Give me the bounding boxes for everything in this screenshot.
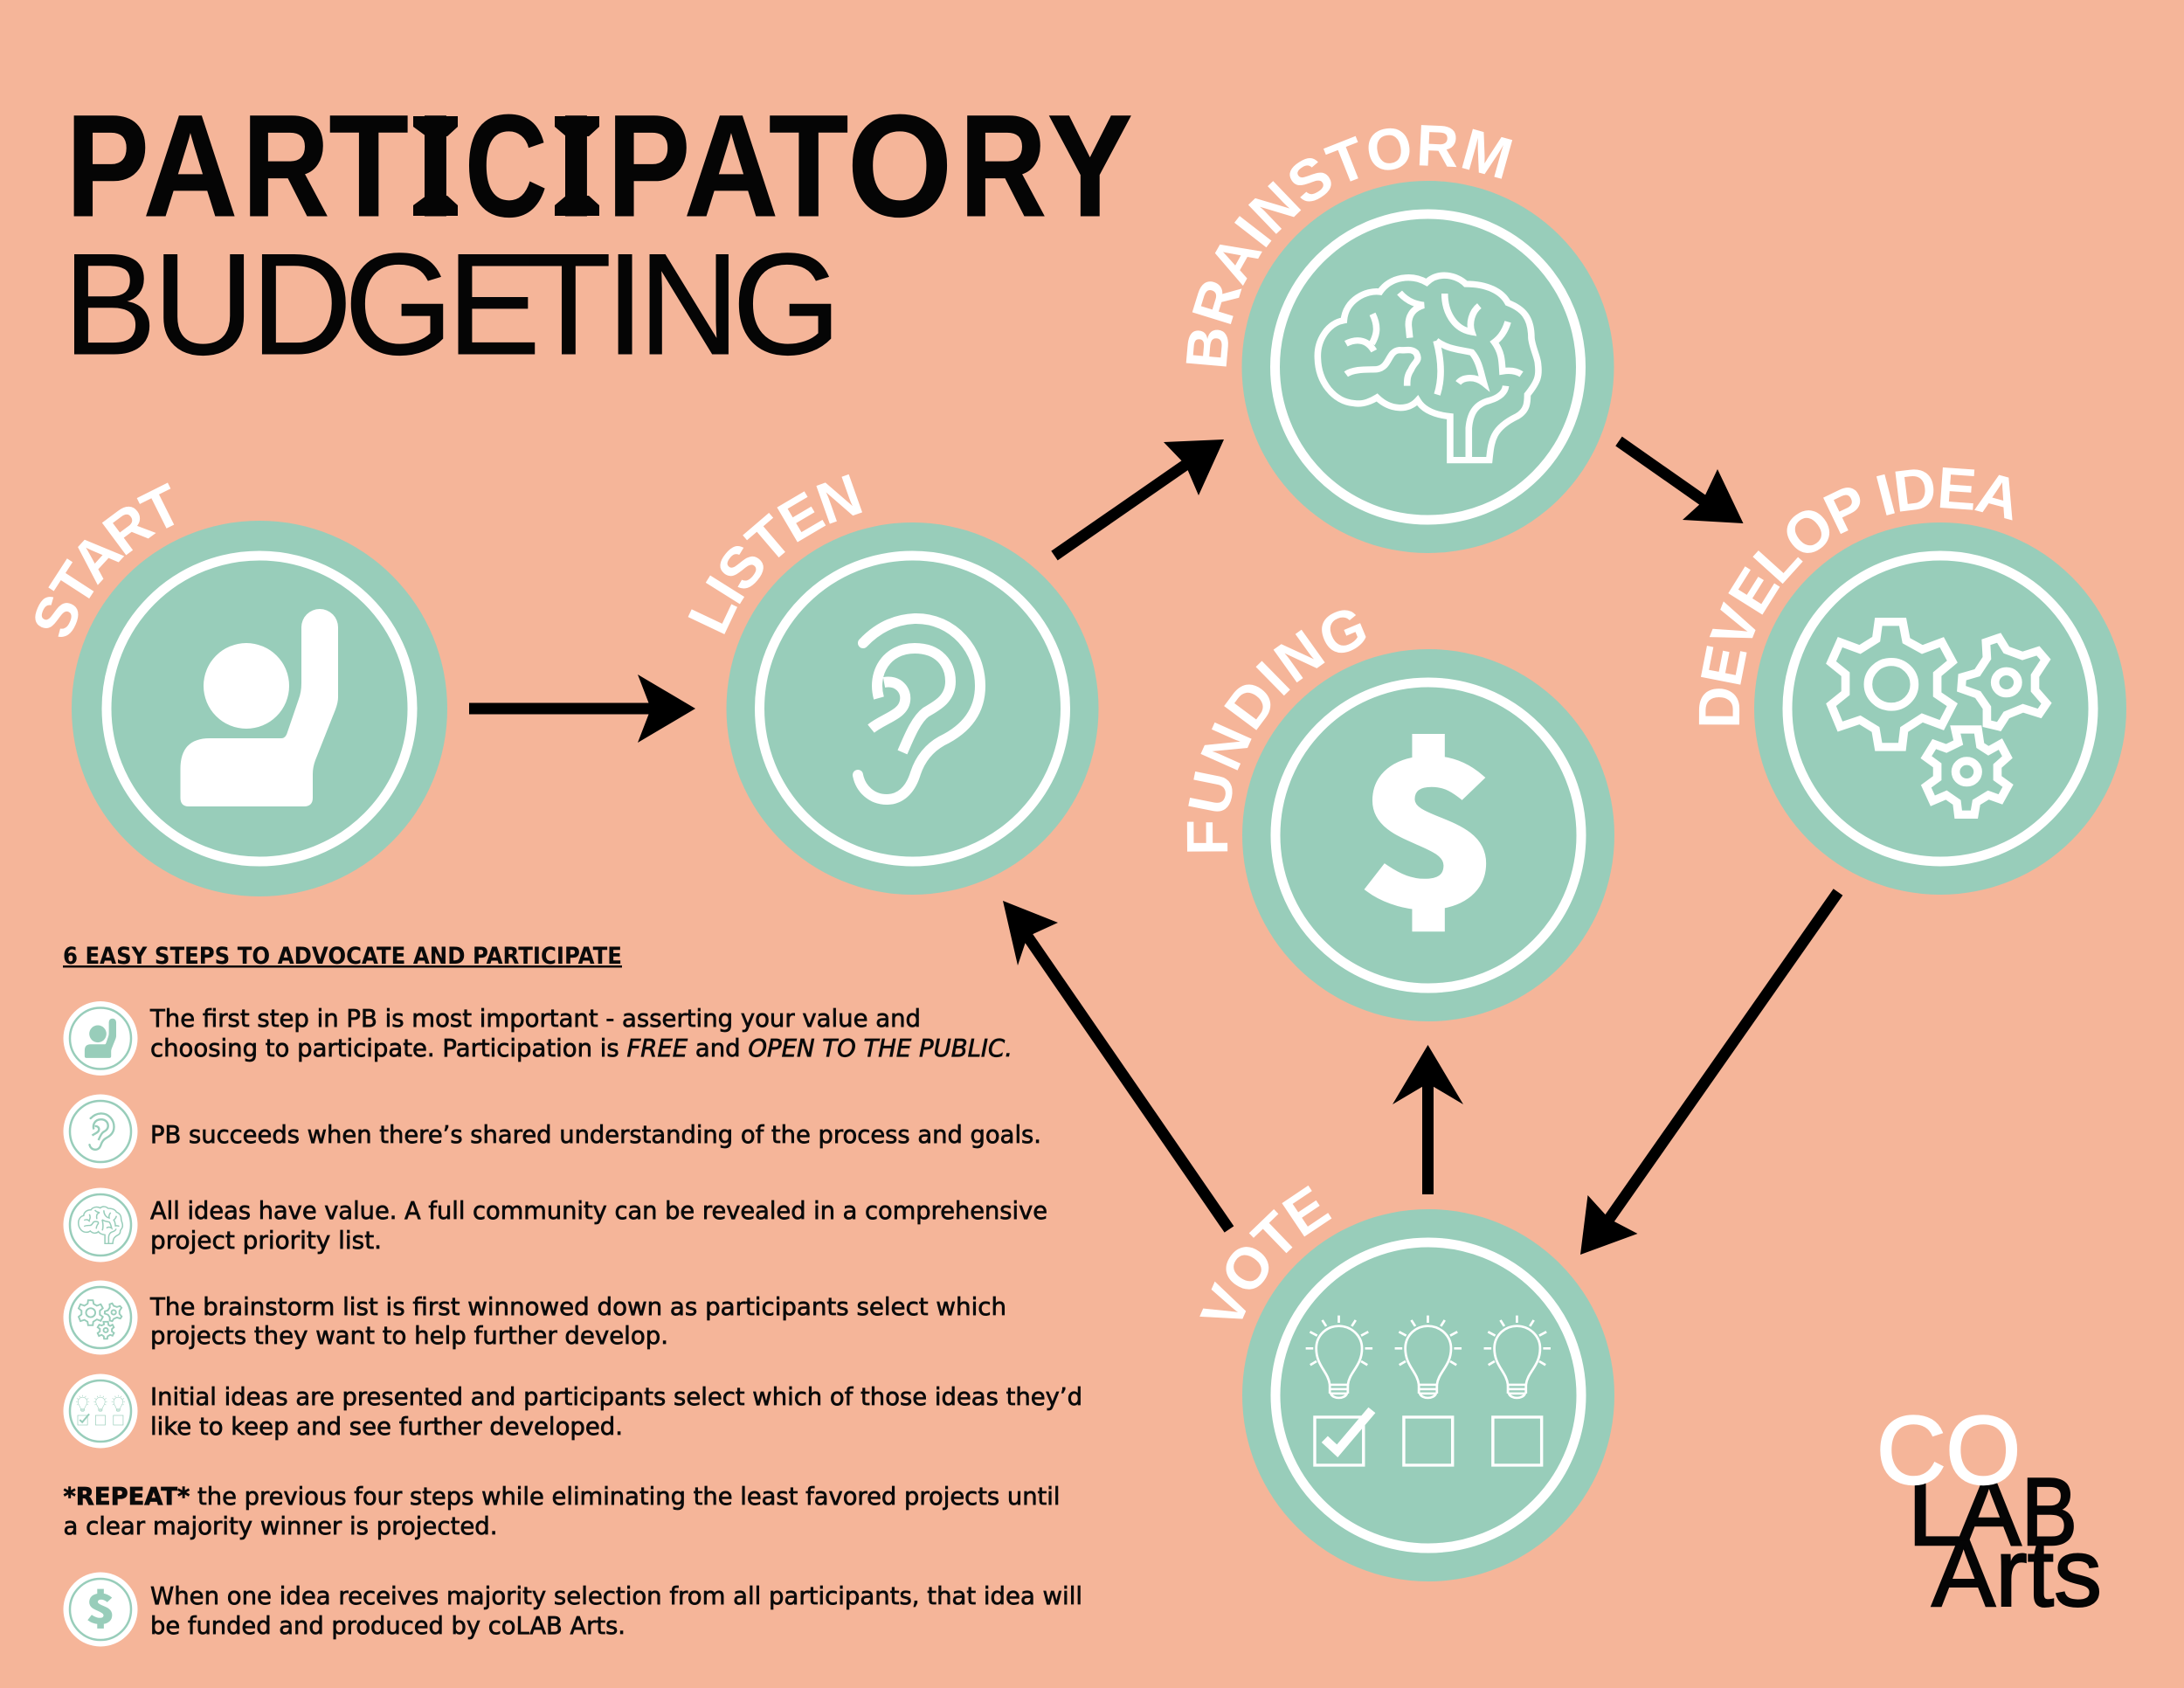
logo word: LAB xyxy=(1908,1458,2077,1566)
logo word: Arts: Arts xyxy=(1932,1519,2102,1627)
icon: light bulbs and check boxes xyxy=(1306,1316,1551,1465)
icon: ear xyxy=(858,619,980,799)
logo word: LAB: B xyxy=(2022,1458,2077,1565)
step 1 row xyxy=(63,1001,1013,1076)
arrow: vote to listen xyxy=(1003,901,1229,1229)
step 6 text: When one idea receives majority selection from all participants, that idea will xyxy=(150,1582,1082,1610)
title line: PARTICIPATORY: Y xyxy=(1047,85,1132,247)
mini icon: ear xyxy=(63,1094,138,1169)
arrow: listen to brainstorm xyxy=(1054,439,1224,556)
section heading: 6 EASY STEPS TO ADVOCATE AND PARTICIPATE xyxy=(63,943,622,970)
step 6 text xyxy=(150,1582,1082,1640)
mini icon: hand xyxy=(63,1001,138,1076)
step 1 text: The first step in PB is most important - asserting your value and xyxy=(149,1005,921,1033)
step 4 text: projects they want to help further develop. xyxy=(150,1322,668,1350)
step 3 text: project priority list. xyxy=(150,1227,382,1255)
mini icon: brain xyxy=(63,1188,138,1262)
label: FUNDING: FUNDING xyxy=(1186,610,1366,852)
title line: PARTICIPATORY: R xyxy=(959,86,1047,247)
arrow: brainstorm to develop idea xyxy=(1619,441,1744,523)
repeat note xyxy=(63,1483,1061,1540)
badge xyxy=(1242,1209,1614,1581)
step 2 text: PB succeeds when there’s shared understanding of the process and goals. xyxy=(150,1121,1041,1149)
title line: PARTICIPATORY: I xyxy=(556,86,597,247)
title xyxy=(63,85,1132,385)
step 6 text: be funded and produced by coLAB Arts. xyxy=(150,1612,625,1640)
step 4 text xyxy=(149,1293,1006,1350)
icon: brain xyxy=(1317,275,1538,460)
title line: PARTICIPATORY: P xyxy=(607,85,690,246)
title line: PARTICIPATORY: A xyxy=(143,86,238,247)
step 5 text xyxy=(150,1383,1082,1441)
title line: PARTICIPATORY: C xyxy=(465,85,548,247)
step 3 text: All ideas have value. A full community can be revealed in a comprehensive xyxy=(150,1197,1047,1225)
title line: PARTICIPATORY: O xyxy=(847,85,952,246)
badge xyxy=(1242,181,1614,553)
title line: PARTICIPATORY: T xyxy=(769,86,848,247)
title line: PARTICIPATORY: R xyxy=(242,86,329,247)
logo: coLAB Arts xyxy=(1876,1397,2102,1627)
mini icon: dollar: $ xyxy=(86,1578,114,1635)
step 5 text: Initial ideas are presented and participants select which of those ideas they’d xyxy=(150,1383,1082,1411)
panel: step START xyxy=(35,482,447,896)
repeat note: a clear majority winner is projected. xyxy=(63,1512,498,1540)
label: BRAINSTORM: BRAINSTORM xyxy=(1186,125,1513,367)
text panel: six easy steps xyxy=(63,943,1082,1646)
logo word: LAB: LA xyxy=(1908,1458,2022,1566)
mini icon: dollar xyxy=(63,1573,138,1646)
step 5 row xyxy=(63,1373,1082,1449)
icon: dollar sign: $ xyxy=(1359,677,1497,960)
step 4 text: The brainstorm list is first winnowed down as participants select which xyxy=(149,1293,1006,1321)
badge xyxy=(1242,649,1614,1021)
step 3 row xyxy=(63,1188,1047,1262)
title line: BUDGETING: BUDGETING xyxy=(63,225,841,385)
step 1 text xyxy=(149,1005,1013,1062)
mini icon: gears xyxy=(63,1281,138,1354)
arrow: start to listen xyxy=(469,675,695,743)
step 2 row xyxy=(63,1094,1041,1169)
panel: step DEVELOP IDEA xyxy=(1698,467,2126,895)
label: START: START xyxy=(35,482,175,637)
title line: PARTICIPATORY: P xyxy=(66,85,149,246)
arrow: vote to funding xyxy=(1393,1045,1463,1194)
step 3 text xyxy=(150,1197,1047,1255)
step 1 text: choosing to participate. Participation is FREE and OPEN TO THE PUBLIC. xyxy=(150,1034,1013,1062)
label: DEVELOP IDEA: DEVELOP IDEA xyxy=(1698,467,2013,725)
repeat note: *REPEAT* the previous four steps while eliminating the least favored projects until xyxy=(63,1483,1061,1511)
logo word: CO: CO xyxy=(1876,1397,2021,1505)
mini icon: vote xyxy=(63,1373,138,1449)
title line: PARTICIPATORY: A xyxy=(684,86,778,247)
panel: step FUNDING xyxy=(1186,610,1614,1021)
panel: step VOTE xyxy=(1199,1185,1614,1581)
badge xyxy=(1754,522,2126,895)
arrow: develop idea to vote xyxy=(1580,892,1838,1255)
icon: raised hand xyxy=(180,609,338,806)
step 4 row xyxy=(63,1281,1006,1354)
label: LISTEN: LISTEN xyxy=(688,474,862,634)
title line: PARTICIPATORY: I xyxy=(415,86,456,247)
panel: step BRAINSTORM xyxy=(1186,125,1614,553)
panel: step LISTEN xyxy=(688,474,1099,895)
step 5 text: like to keep and see further developed. xyxy=(150,1413,623,1441)
label: VOTE: VOTE xyxy=(1199,1185,1331,1319)
badge xyxy=(727,522,1099,895)
icon: gears xyxy=(1831,622,2047,814)
title line: PARTICIPATORY: T xyxy=(328,86,409,247)
step 6 row xyxy=(63,1573,1082,1646)
title line: PARTICIPATORY xyxy=(66,85,1132,247)
badge xyxy=(72,521,447,896)
